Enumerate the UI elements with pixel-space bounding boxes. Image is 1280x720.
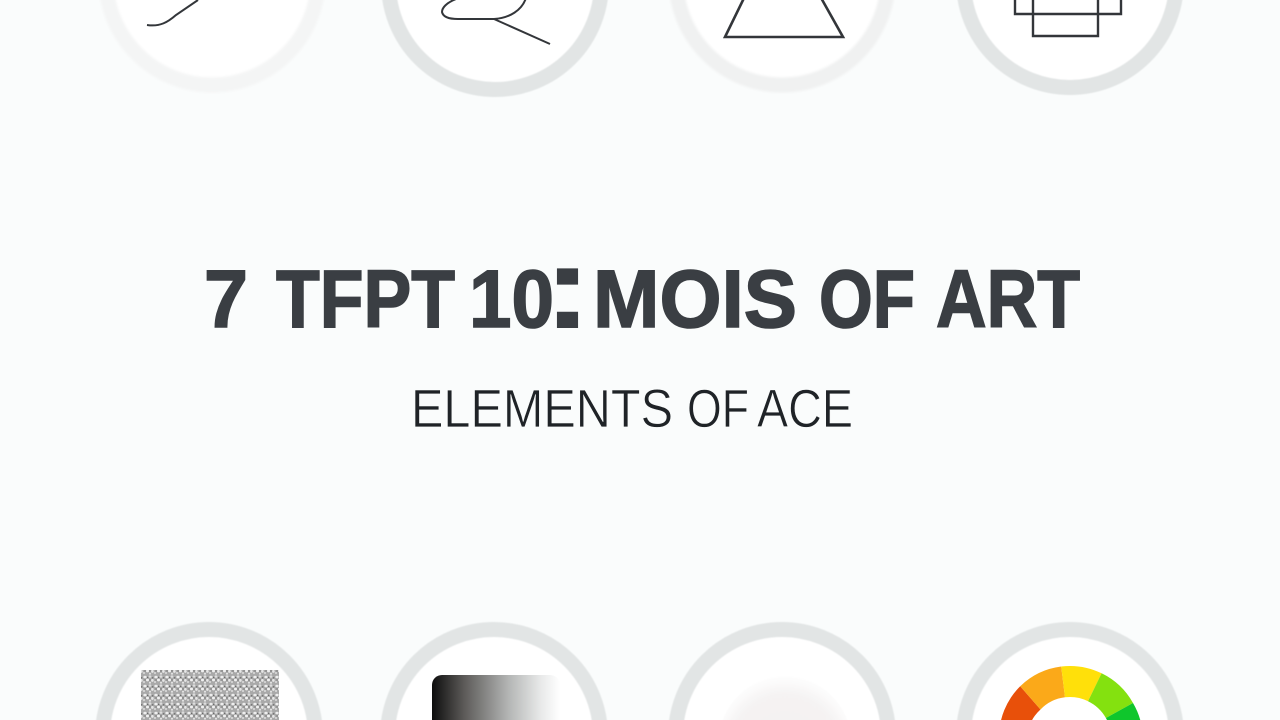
icon: black to white gradient <box>432 675 560 720</box>
icon: looped line <box>442 0 550 44</box>
bottom circle: texture <box>96 622 322 720</box>
icon: pale sphere <box>719 676 851 720</box>
top circle: form triangle <box>672 0 892 92</box>
top circle: line <box>146 0 198 26</box>
bottom circle: value gradient <box>381 622 607 720</box>
top circle: shape loop <box>382 0 608 97</box>
icon: triangle <box>725 0 843 37</box>
icon: colour wheel <box>999 666 1143 720</box>
title <box>204 255 1080 340</box>
top circle: overlapping squares <box>958 0 1182 95</box>
icon: squares <box>1015 0 1121 36</box>
icon: curved line <box>147 0 198 25</box>
subtitle <box>411 380 853 435</box>
bottom circle: pale sphere <box>669 622 895 720</box>
bottom circle: colour wheel <box>957 622 1183 720</box>
icon: texture swatch <box>141 670 279 720</box>
